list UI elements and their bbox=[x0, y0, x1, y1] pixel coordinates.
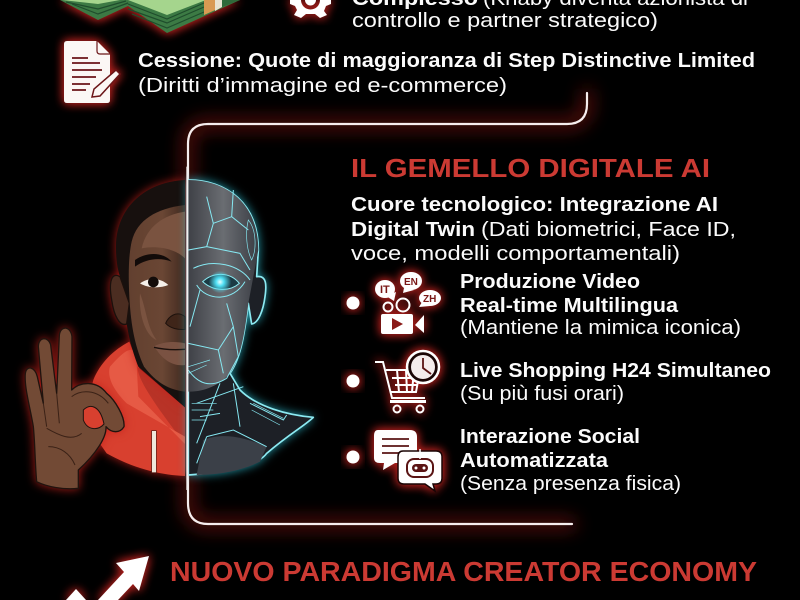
heading: il gemello digitale AI: IL GEMELLO DIGITALE AI bbox=[351, 153, 710, 183]
icon: multilingual video: IT bbox=[380, 284, 390, 296]
hoodie bbox=[83, 342, 185, 476]
text block: cessione: Cessione: Quote di maggioranza di Step Distinctive Limited bbox=[138, 50, 755, 72]
icon: growth arrow bbox=[66, 556, 149, 600]
illustration: human and AI half face bbox=[25, 167, 313, 490]
icon: gear bbox=[290, 0, 331, 18]
icon: multilingual video bbox=[375, 272, 441, 334]
AI glowing eye bbox=[203, 271, 239, 293]
neon frame bbox=[188, 93, 587, 524]
text block: video production: (Mantiene la mimica iconica) bbox=[460, 317, 741, 339]
text block: live shopping bbox=[460, 360, 771, 405]
text block: complesso: controllo e partner strategico) bbox=[352, 10, 658, 32]
icon: signed document bbox=[64, 41, 120, 103]
text block: cuore tecnologico bbox=[351, 194, 736, 265]
icon: shopping cart with clock bbox=[375, 351, 439, 412]
icon: money stacks bbox=[60, 0, 240, 33]
divider line bbox=[186, 167, 188, 490]
text block: social interaction: Interazione Social bbox=[460, 426, 640, 448]
AI half bbox=[188, 180, 313, 475]
text block: complesso bbox=[352, 0, 748, 32]
text block: social interaction: (Senza presenza fisica) bbox=[460, 473, 681, 495]
text block: social interaction bbox=[460, 426, 681, 495]
human head bbox=[110, 180, 185, 407]
bullet 2 bbox=[346, 374, 360, 388]
bullet 1 bbox=[346, 296, 360, 310]
text block: cuore tecnologico: voce, modelli comportamentali) bbox=[351, 243, 680, 265]
text block: cuore tecnologico: Digital Twin bbox=[351, 219, 475, 241]
icon: chat bubble and robot bbox=[374, 430, 442, 491]
text block: social interaction: Automatizzata bbox=[460, 450, 609, 472]
AI circuit lines bbox=[188, 190, 287, 463]
text block: video production: Real-time Multilingua bbox=[460, 295, 679, 317]
text block: video production bbox=[460, 271, 741, 339]
bullet 3 bbox=[346, 450, 360, 464]
hand OK gesture bbox=[25, 328, 124, 489]
text block: cuore tecnologico: (Dati biometrici, Face ID, bbox=[481, 219, 736, 241]
icon: multilingual video: ZH bbox=[423, 294, 436, 305]
text block: live shopping: (Su più fusi orari) bbox=[460, 383, 624, 405]
text block: video production: Produzione Video bbox=[460, 271, 640, 293]
heading: nuovo paradigma creator economy: NUOVO PARADIGMA CREATOR ECONOMY bbox=[170, 556, 757, 587]
text block: cessione: (Diritti d’immagine ed e-commerce) bbox=[138, 75, 507, 97]
icon: multilingual video: EN bbox=[404, 277, 418, 288]
text block: cuore tecnologico: Cuore tecnologico: Integrazione AI bbox=[351, 194, 718, 216]
text block: cessione bbox=[138, 50, 755, 97]
text block: live shopping: Live Shopping H24 Simultaneo bbox=[460, 360, 771, 382]
